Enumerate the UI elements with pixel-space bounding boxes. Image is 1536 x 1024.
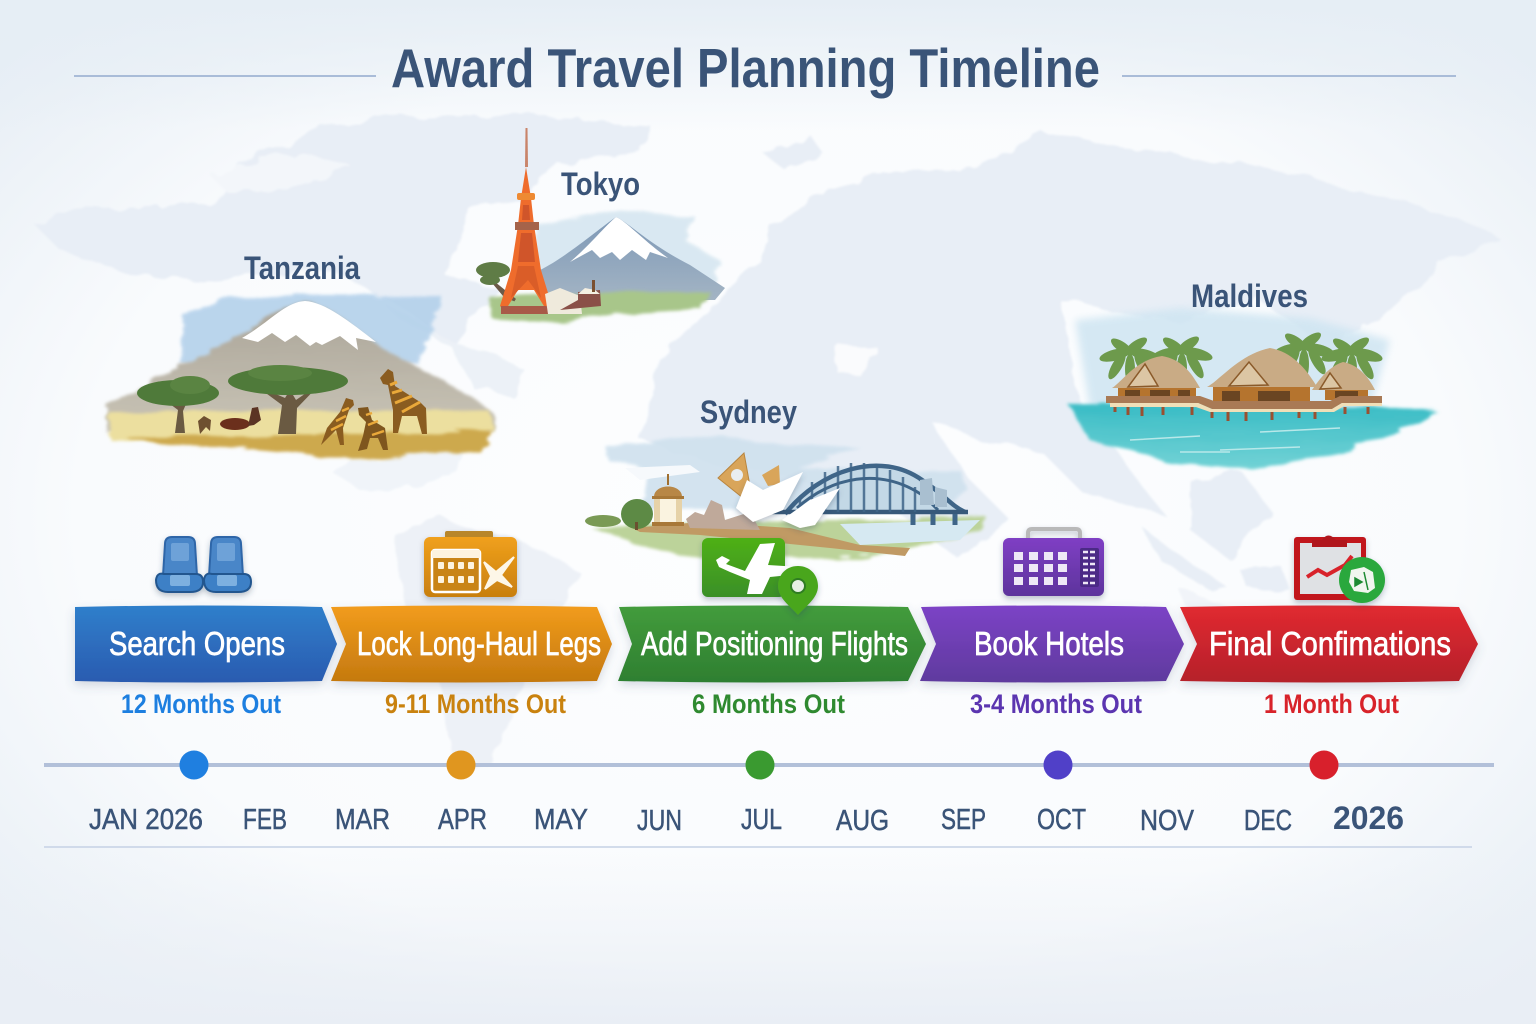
month labels: AUG <box>836 805 889 837</box>
month labels: 2026 <box>1333 800 1404 836</box>
banner: Add Positioning Flights <box>618 606 926 682</box>
illustration: Tanzania <box>105 295 495 460</box>
banner: Final Confimations <box>1180 606 1478 682</box>
timing labels: 3-4 Months Out <box>970 689 1142 719</box>
month labels: APR <box>438 804 487 836</box>
banner: Book Hotels <box>920 606 1184 682</box>
month labels: SEP <box>941 804 986 836</box>
month labels: FEB <box>243 804 287 836</box>
domed pavilion <box>652 474 684 526</box>
month labels: MAR <box>335 804 390 836</box>
month labels: JUL <box>741 804 782 836</box>
timing labels: 1 Month Out <box>1264 689 1399 719</box>
banner: Final Confimations: Final Confimations <box>1209 625 1451 662</box>
overwater bungalows <box>1106 348 1382 421</box>
timing labels <box>121 689 1399 719</box>
giraffes and wildlife <box>198 369 427 451</box>
icon: hotel building <box>1003 529 1104 596</box>
label: Sydney: Sydney <box>700 394 797 430</box>
harbour bridge <box>770 463 968 525</box>
illustration: Sydney <box>585 438 985 558</box>
tokyo tower <box>500 128 561 314</box>
icon: airline seats <box>156 537 251 592</box>
tree <box>585 499 653 530</box>
month labels: JUN <box>637 805 682 837</box>
tree left <box>137 376 219 433</box>
banner: Add Positioning Flights: Add Positioning Flights <box>641 625 908 662</box>
icon: calendar with plane <box>424 531 517 597</box>
title: Award Travel Planning Timeline <box>391 37 1100 99</box>
banner: Book Hotels: Book Hotels <box>974 625 1124 662</box>
label: Tokyo: Tokyo <box>561 166 640 202</box>
illustration: Maldives <box>1070 308 1437 470</box>
timing labels: 9-11 Months Out <box>385 689 566 719</box>
timing labels: 6 Months Out <box>692 689 845 719</box>
banner: Lock Long-Haul Legs: Lock Long-Haul Legs <box>357 625 601 662</box>
world map <box>32 112 1500 770</box>
palm trees <box>1098 329 1384 384</box>
month labels: OCT <box>1037 804 1086 836</box>
banner: Search Opens <box>75 606 337 682</box>
label: Tanzania: Tanzania <box>244 250 360 286</box>
month labels: NOV <box>1140 805 1195 837</box>
banner: Lock Long-Haul Legs <box>331 606 612 682</box>
pine tree <box>476 262 515 300</box>
month labels: MAY <box>534 804 588 836</box>
timeline axis with milestone dots <box>44 750 1494 780</box>
icon: clipboard with check badge <box>1294 536 1385 603</box>
illustration: Tokyo <box>476 128 725 322</box>
shrine <box>545 280 601 314</box>
month labels <box>89 800 1404 837</box>
tree right <box>228 365 348 434</box>
month labels: JAN 2026 <box>89 804 203 836</box>
icon: plane and location pin <box>702 538 818 615</box>
opera house shell <box>718 453 840 528</box>
city blocks <box>686 500 760 530</box>
timing labels: 12 Months Out <box>121 689 281 719</box>
month labels: DEC <box>1244 805 1292 837</box>
label: Maldives: Maldives <box>1191 278 1308 314</box>
banner: Search Opens: Search Opens <box>109 625 285 662</box>
